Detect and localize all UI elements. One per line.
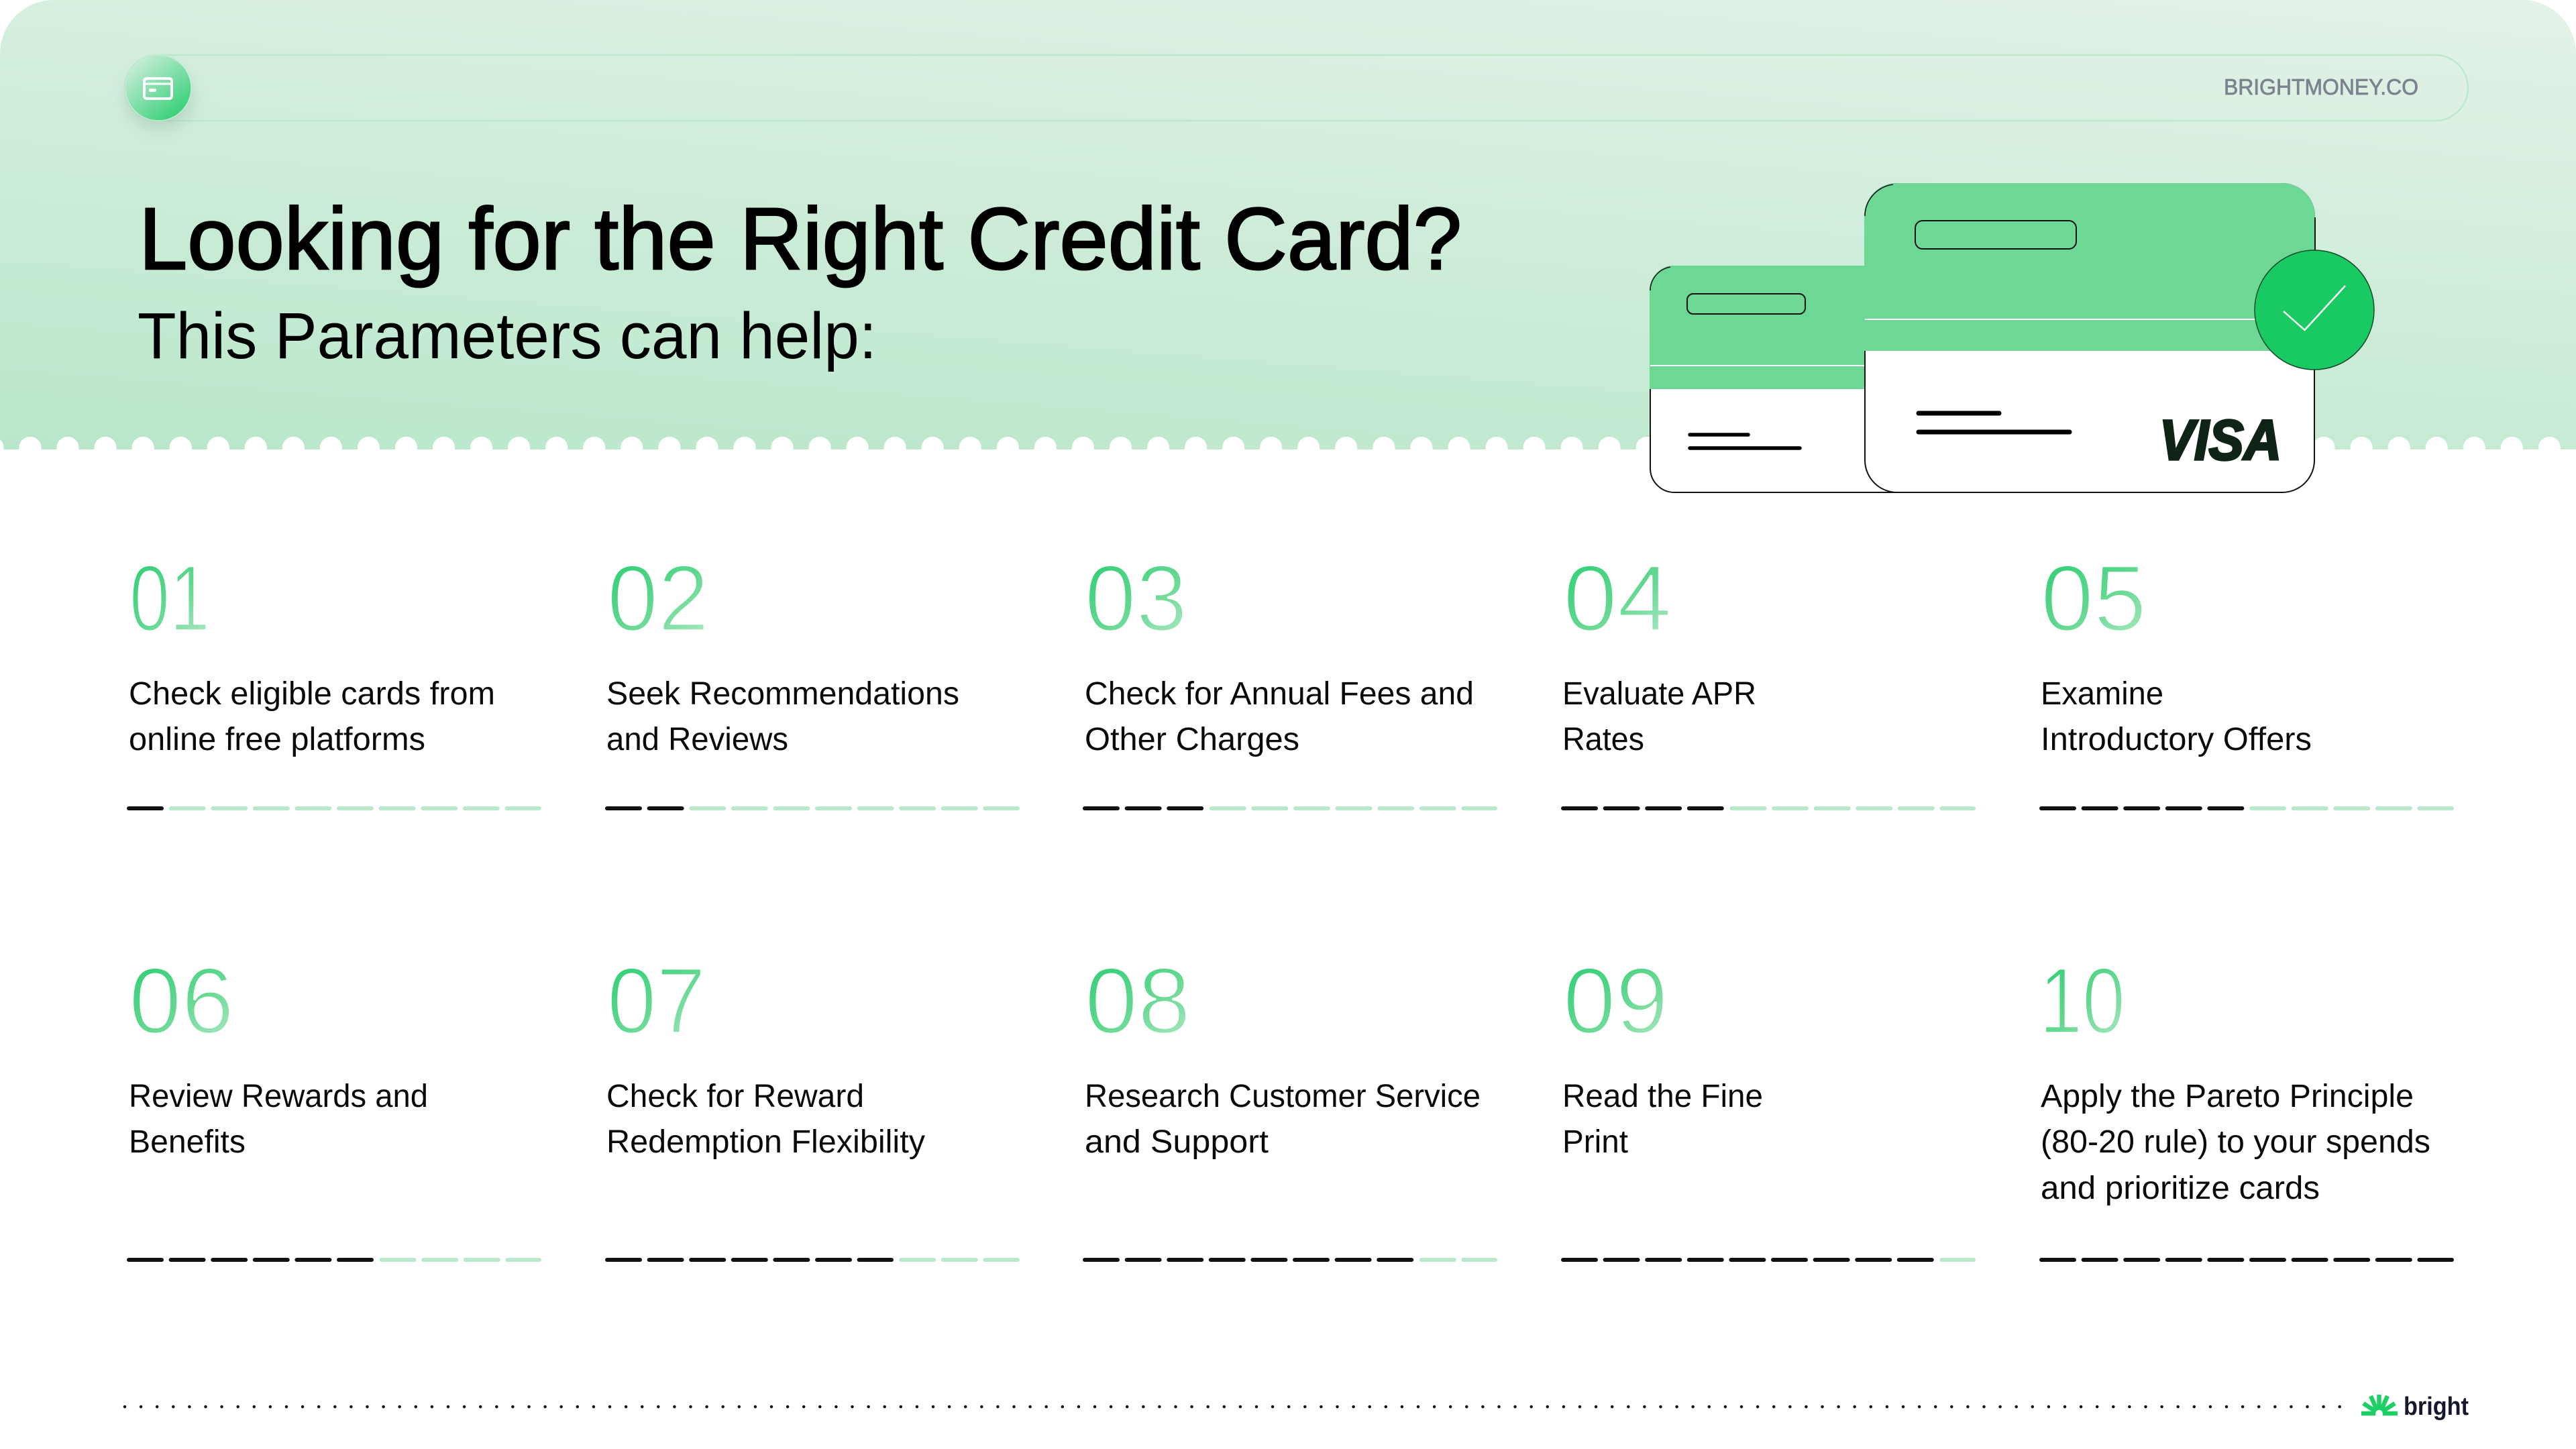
item 04: Evaluate APR [1562,676,1756,712]
item 05: Introductory Offers [2041,722,2312,757]
item 08: and Support [1085,1124,1269,1160]
item 09: 09 [1563,948,1668,1053]
icon: check badge [2255,250,2374,370]
item 07 [606,948,1018,1260]
item 07: Redemption Flexibility [606,1124,925,1160]
top navigation pill [125,55,2468,121]
small card [1650,266,1932,492]
item 04 [1562,545,1974,808]
item 06: 06 [129,948,234,1053]
wordmark: bright [2404,1393,2469,1421]
item 08: Research Customer Service [1085,1079,1481,1114]
item 05 [2041,545,2452,808]
item 10: 10 [2039,948,2125,1053]
item 10 [2039,948,2452,1260]
item 05: Examine [2041,676,2163,712]
bright logo [2361,1393,2469,1421]
item 03: Check for Annual Fees and [1085,676,1474,712]
item 09: Print [1562,1124,1628,1160]
footer dotted line [125,1405,2346,1408]
item 10: (80-20 rule) to your spends [2041,1124,2430,1160]
item 02 [606,545,1018,808]
item 01 [129,545,539,808]
website label: BRIGHTMONEY.CO [2224,74,2418,99]
item 01: Check eligible cards from [129,676,495,712]
item 05: 05 [2041,545,2147,651]
icon: sun [2361,1395,2398,1413]
item 04: 04 [1563,545,1672,651]
item 09: Read the Fine [1562,1079,1763,1114]
item 08 [1085,948,1495,1260]
subtitle: This Parameters can help: [138,299,877,372]
title: Looking for the Right Credit Card? [139,189,1462,288]
item 08: 08 [1085,948,1191,1053]
item 02: Seek Recommendations [606,676,959,712]
item 02: and Reviews [606,722,788,757]
item 07: Check for Reward [606,1079,864,1114]
item 01: 01 [129,545,210,651]
item 02: 02 [607,545,709,651]
item 06: Review Rewards and [129,1079,428,1114]
item 01: online free platforms [129,722,425,757]
item 07: 07 [607,948,706,1053]
large card [1865,184,2315,492]
icon: card button [125,55,191,127]
item 03: 03 [1085,545,1187,651]
item 03: Other Charges [1085,722,1299,757]
illustration: credit cards [1650,184,2374,492]
item 09 [1562,948,1974,1260]
item 04: Rates [1562,722,1644,757]
item 03 [1085,545,1495,808]
item 10: and prioritize cards [2041,1171,2320,1206]
visa wordmark: VISA [2159,409,2282,472]
item 06: Benefits [129,1124,246,1160]
panel: header band [0,0,2576,449]
item 06 [129,948,539,1260]
item 10: Apply the Pareto Principle [2041,1079,2414,1114]
